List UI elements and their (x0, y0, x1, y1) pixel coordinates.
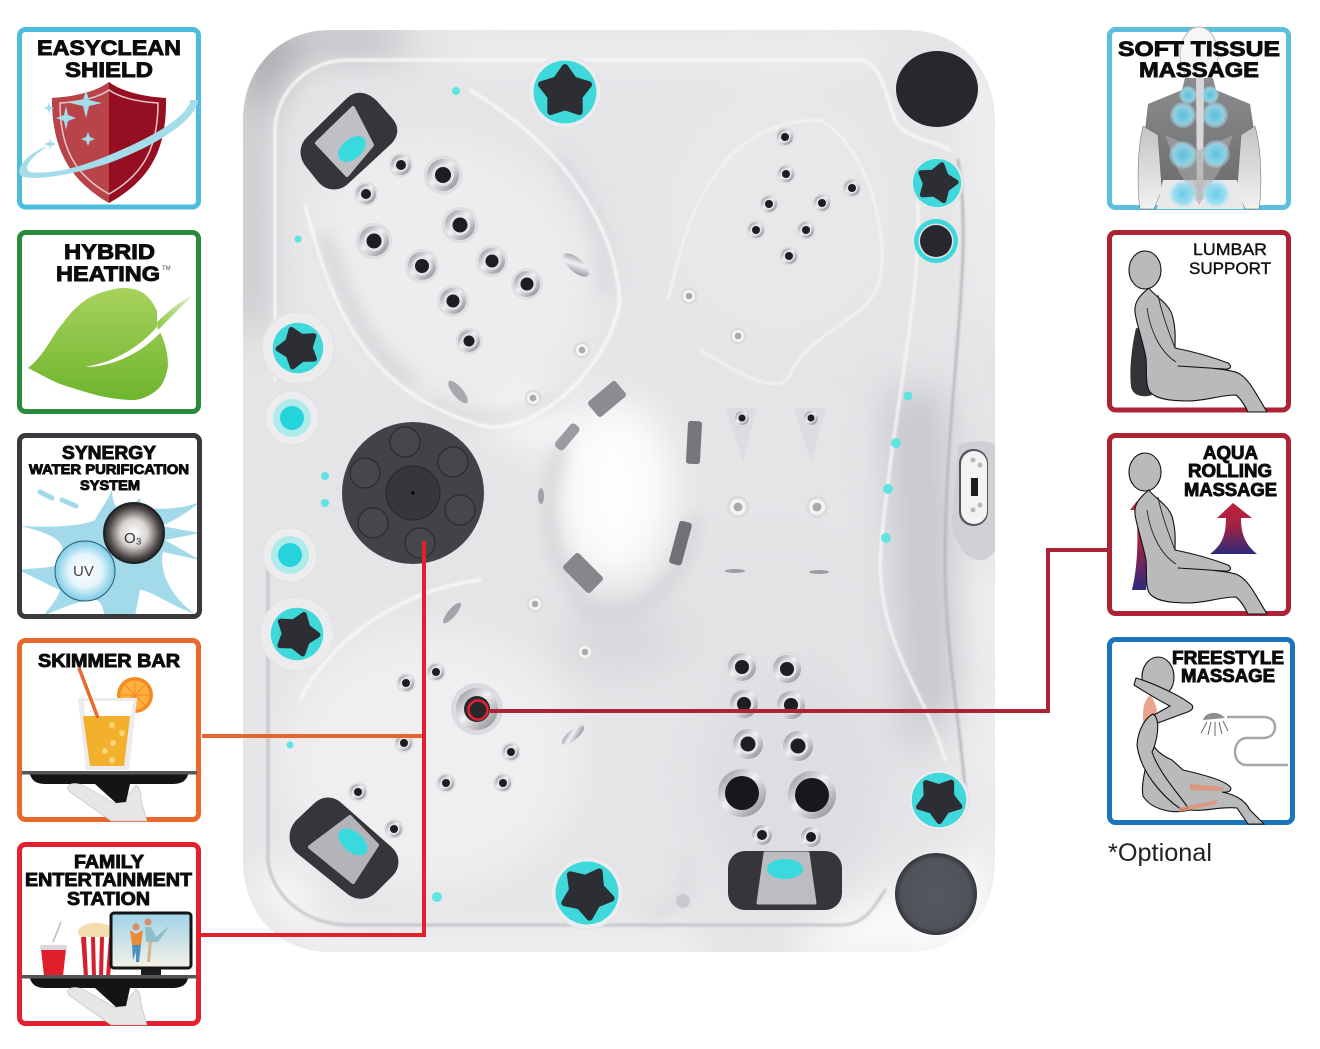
tile: EasyClean Shield: SHIELD (65, 59, 153, 82)
tile: Freestyle Massage: FREESTYLE (1172, 648, 1284, 668)
tile: Aqua Rolling Massage (1110, 436, 1288, 614)
diverter valves with cyan light (260, 56, 977, 936)
tile: Soft Tissue Massage: SOFT TISSUE (1118, 37, 1280, 61)
tile: Skimmer Bar (20, 640, 198, 821)
tile: EasyClean Shield (19, 30, 199, 207)
centre jet (451, 683, 503, 735)
tile: Family Entertainment Station: FAMILY (74, 851, 145, 872)
tile: Hybrid Heating: TM (162, 266, 171, 272)
tile: Synergy Water Purification: WATER PURIFICATION (29, 461, 189, 477)
icon: purification splash: UV (73, 563, 94, 580)
tile: Family Entertainment Station: STATION (67, 888, 150, 909)
tile: Aqua Rolling Massage: ROLLING (1188, 461, 1272, 481)
tile: Skimmer Bar: SKIMMER BAR (38, 651, 180, 671)
icon: figure reaching with hand shower (1134, 657, 1264, 824)
tile: Family Entertainment Station (20, 844, 198, 1025)
illuminated buttons (263, 219, 958, 582)
icon: shower wand (1201, 713, 1288, 765)
tile: Soft Tissue Massage (1110, 27, 1288, 209)
water jets: lower right footwell (676, 650, 836, 908)
icon: cup, popcorn, tablet on tray (22, 913, 197, 1025)
connector lines (200, 541, 1107, 935)
icon: drink on tray (22, 668, 197, 821)
water jets: left lounge (354, 153, 593, 406)
soft seat shading (318, 167, 700, 614)
footnote: *Optional (1108, 839, 1212, 867)
filter lid (342, 422, 484, 564)
tile: Aqua Rolling Massage: MASSAGE (1184, 480, 1277, 500)
tile: Synergy Water Purification: SYSTEM (80, 477, 140, 493)
headrest: bottom left (296, 804, 392, 893)
tile: Hybrid Heating: HEATING (56, 263, 160, 286)
headrest: bottom centre (728, 851, 842, 910)
icon: purification splash: O₃ (124, 530, 142, 547)
tile: Synergy Water Purification (18, 436, 200, 616)
tile: EasyClean Shield: EASYCLEAN (37, 37, 181, 60)
centre seat jets (538, 380, 829, 594)
icon: muscular back (1138, 27, 1261, 209)
tile: Lumbar Support: SUPPORT (1189, 259, 1271, 278)
tile: Soft Tissue Massage: MASSAGE (1139, 58, 1259, 82)
icon: shield (19, 82, 198, 203)
water jets: upper right seat (681, 127, 862, 344)
icon: seated figure with lumbar cushion (1129, 251, 1267, 412)
hot tub shell (243, 30, 995, 962)
tile: Lumbar Support (1110, 232, 1288, 412)
basin contour lines (268, 60, 965, 925)
tile: Freestyle Massage: MASSAGE (1181, 666, 1275, 686)
tile: Family Entertainment Station: ENTERTAINMENT (25, 869, 193, 890)
icon: purification splash (18, 490, 200, 616)
tile: Hybrid Heating (20, 232, 198, 412)
tile: Synergy Water Purification: SYNERGY (62, 443, 156, 463)
water jets: lower left seat (348, 596, 593, 839)
headrest: top left (308, 100, 390, 182)
corner cup holders (895, 51, 978, 935)
cyan accent lights (286, 87, 912, 902)
tile: Aqua Rolling Massage: AQUA (1203, 443, 1258, 463)
tile: Hybrid Heating: HYBRID (64, 241, 155, 264)
icon: seated figure with rolling arrow on back (1129, 453, 1267, 614)
tile: Lumbar Support: LUMBAR (1193, 240, 1267, 259)
icon: rising arrow (1210, 503, 1257, 554)
control panel (952, 441, 995, 560)
tile: Freestyle Massage (1110, 640, 1292, 824)
icon: leaf (28, 288, 192, 400)
